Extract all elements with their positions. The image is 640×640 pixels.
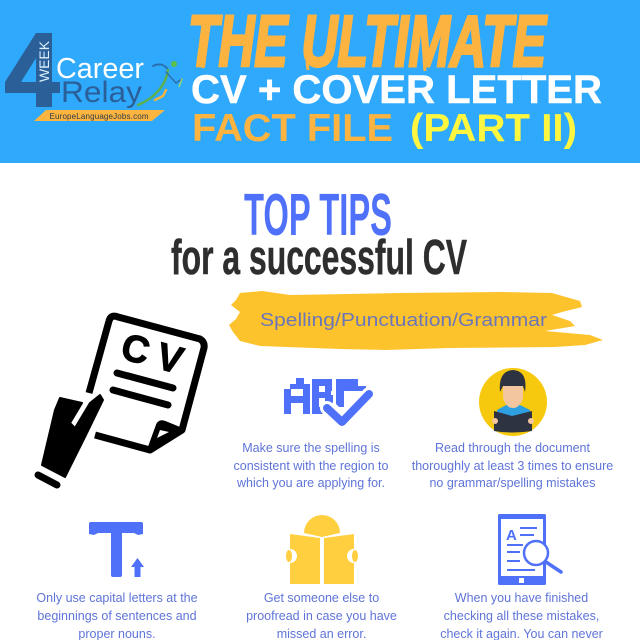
icon: person reading [479, 368, 547, 436]
logo tag: website [34, 110, 165, 121]
text: spelling consistency: which you are applying for. [236, 476, 385, 490]
logo word: week: WEEK [36, 40, 52, 82]
logo tag: website: EuropeLanguageJobs.com [50, 112, 149, 121]
text: proofread: Get someone else to [264, 591, 379, 605]
icon: tablet with magnifier [498, 514, 561, 585]
icon: hand holding cv: CV [117, 326, 188, 383]
text: proofread: proofread in case you have [246, 609, 397, 623]
text: read through: no grammar/spelling mistakes [429, 476, 596, 490]
logo: 4 Week Career Relay [5, 33, 182, 121]
title: fact file part ii: FACT FILE [192, 107, 393, 150]
logo icon: runner [138, 61, 182, 105]
title: the ultimate: THE ULTIMATE [188, 2, 548, 82]
panel: header [0, 0, 640, 163]
panel: tip proofread [246, 515, 397, 640]
text: capital letters: beginnings of sentences and [37, 609, 197, 623]
panel: tip read through [412, 368, 613, 490]
panel: spelling banner [229, 291, 603, 350]
heading: for a successful cv: for a successful CV [171, 231, 467, 285]
logo word: relay: Relay [61, 76, 142, 109]
text: read through: Read through the document [435, 441, 591, 455]
text: spelling consistency: consistent with the region to [234, 459, 389, 473]
panel: tip capital letters [36, 522, 198, 640]
icon: capital t [89, 522, 144, 577]
brush stroke [229, 291, 603, 350]
logo word: career: Career [56, 53, 144, 85]
text: spelling consistency: Make sure the spelling is [242, 441, 380, 455]
heading: top tips: TOP TIPS [244, 182, 392, 248]
banner text: Spelling/Punctuation/Grammar [260, 309, 547, 330]
title: fact file part ii: (PART II) [410, 107, 577, 150]
panel: tip spelling consistency [234, 378, 389, 490]
icon: abc check [284, 378, 369, 422]
title: cv + cover letter: CV + COVER LETTER [191, 68, 602, 112]
text: check again: When you have finished [455, 591, 588, 605]
text: capital letters: Only use capital letters at the [36, 591, 198, 605]
logo numeral 4 [5, 33, 60, 107]
icon: tablet with magnifier: A [506, 527, 517, 544]
icon: open book [286, 515, 358, 584]
icon: hand holding cv [38, 316, 204, 485]
text: check again: checking all these mistakes, [444, 609, 599, 623]
panel: tip check again [440, 514, 603, 640]
title: fact file part ii [192, 107, 577, 150]
text: read through: thoroughly at least 3 times to ensure [412, 459, 613, 473]
